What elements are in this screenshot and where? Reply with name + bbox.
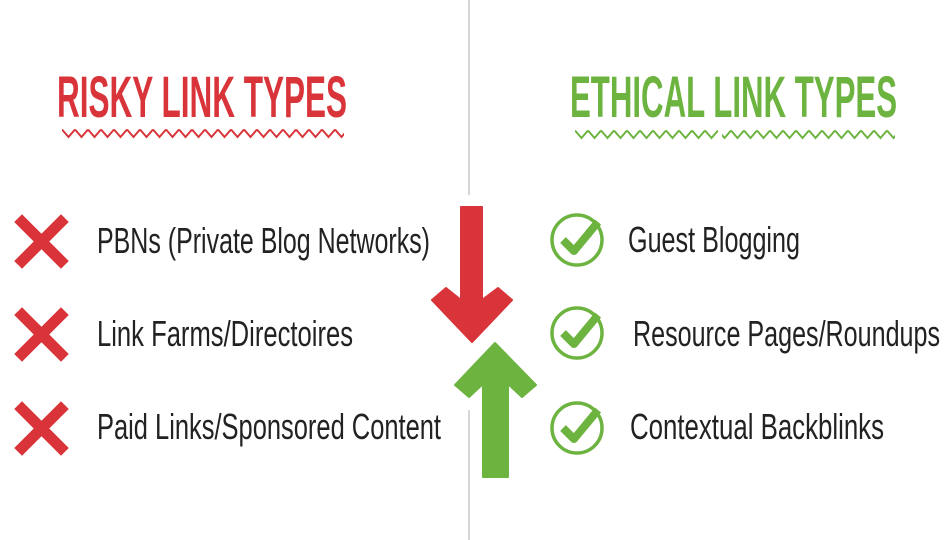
- item: PBNs: PBNs (Private Blog Networks): [97, 220, 430, 261]
- panel: risky list: [22, 220, 441, 448]
- item: contextual backlinks: [552, 403, 884, 453]
- item: paid links: [22, 406, 441, 448]
- item: link farms: Link Farms/Directoires: [97, 313, 353, 354]
- item: PBNs: [22, 220, 430, 261]
- item: link farms: [22, 313, 353, 354]
- title: risky link types: RISKY LINK TYPES: [57, 65, 347, 130]
- item: guest blogging: Guest Blogging: [628, 219, 800, 260]
- item: paid links: Paid Links/Sponsored Content: [97, 406, 441, 447]
- arrow: green up: [455, 343, 536, 477]
- item: guest blogging: [552, 215, 800, 265]
- arrow: red down: [432, 207, 512, 342]
- item: resource pages: [552, 308, 940, 358]
- panel: ethical list: [552, 215, 940, 453]
- title: risky link types: [57, 65, 347, 139]
